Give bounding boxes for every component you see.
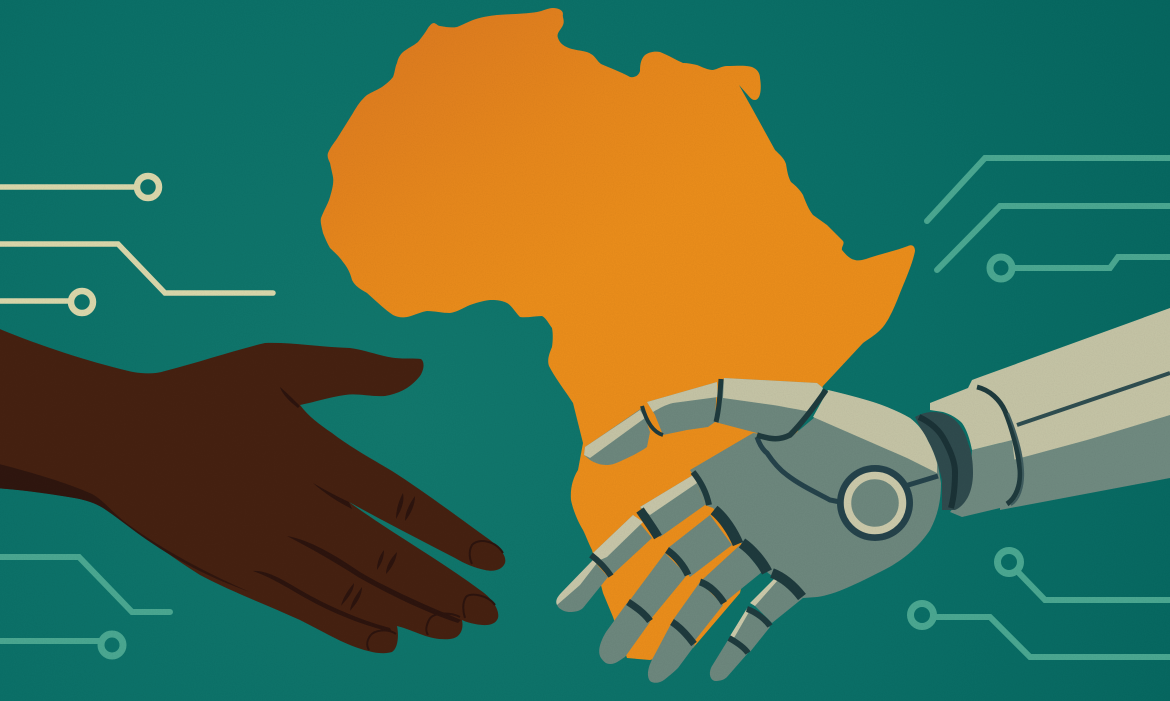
hand silhouette xyxy=(0,327,505,653)
circuit lines: upper left xyxy=(0,176,273,313)
palm xyxy=(690,390,941,598)
index finger xyxy=(556,472,709,612)
palm joint ring xyxy=(837,465,913,541)
forearm inner section xyxy=(950,440,1017,517)
ring finger xyxy=(648,543,767,683)
thumb xyxy=(584,378,826,465)
robot arm xyxy=(556,308,1170,683)
wrist collar xyxy=(915,412,973,510)
palm seam xyxy=(757,437,938,503)
wrist collar ring xyxy=(919,417,955,508)
circuit lines: lower right xyxy=(910,550,1170,657)
finger creases xyxy=(253,387,461,632)
circuit lines: upper right xyxy=(927,158,1170,279)
forearm outer section xyxy=(1000,360,1170,510)
middle finger xyxy=(599,510,738,664)
palm highlight xyxy=(813,390,937,473)
fingernails xyxy=(367,541,503,650)
little finger xyxy=(710,573,803,681)
map of Africa xyxy=(321,8,915,660)
circuit lines: lower left xyxy=(0,557,170,656)
human hand xyxy=(0,327,505,653)
forearm band xyxy=(977,387,1020,504)
wrist shadow xyxy=(0,463,250,592)
forearm xyxy=(930,308,1170,517)
